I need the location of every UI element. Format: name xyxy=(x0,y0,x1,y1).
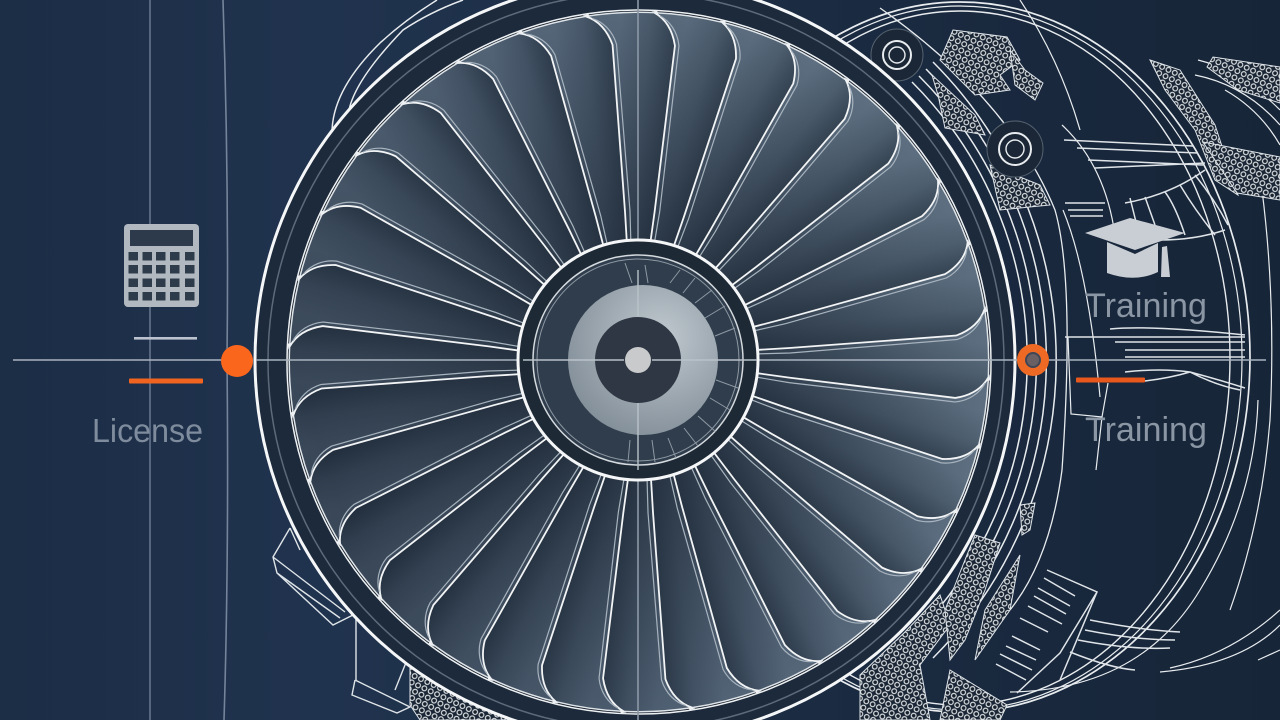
right column: Training label: Training xyxy=(1085,411,1207,449)
hub center dot xyxy=(625,347,651,373)
right column: graduation cap icon xyxy=(1085,218,1185,278)
left column: orange rule xyxy=(129,378,203,384)
engine mount bolts xyxy=(871,29,1043,177)
fan blades xyxy=(264,0,1014,720)
lower-left bracket outline xyxy=(273,528,410,713)
outer fan ring xyxy=(255,0,1015,720)
engine casing arcs around the fan xyxy=(880,0,1115,658)
right orange marker xyxy=(1017,344,1049,376)
tubes and pipes at the right xyxy=(996,140,1245,693)
upper-left cowl arcs xyxy=(332,0,463,133)
mesh detail clusters xyxy=(410,30,1280,720)
engine nacelle outline xyxy=(670,2,1280,712)
right column: orange rule xyxy=(1076,378,1145,382)
right column: Training heading: Training xyxy=(1085,287,1207,325)
hub inner vanes xyxy=(625,263,738,462)
central hub xyxy=(518,240,758,480)
left orange marker xyxy=(221,345,253,377)
hub dark disk xyxy=(595,317,681,403)
left column: white rule xyxy=(134,337,197,340)
left column: calculator icon xyxy=(124,224,199,307)
left column: License label: License xyxy=(92,412,203,449)
vertical guide lines xyxy=(150,0,228,720)
hub light disk xyxy=(568,285,718,435)
